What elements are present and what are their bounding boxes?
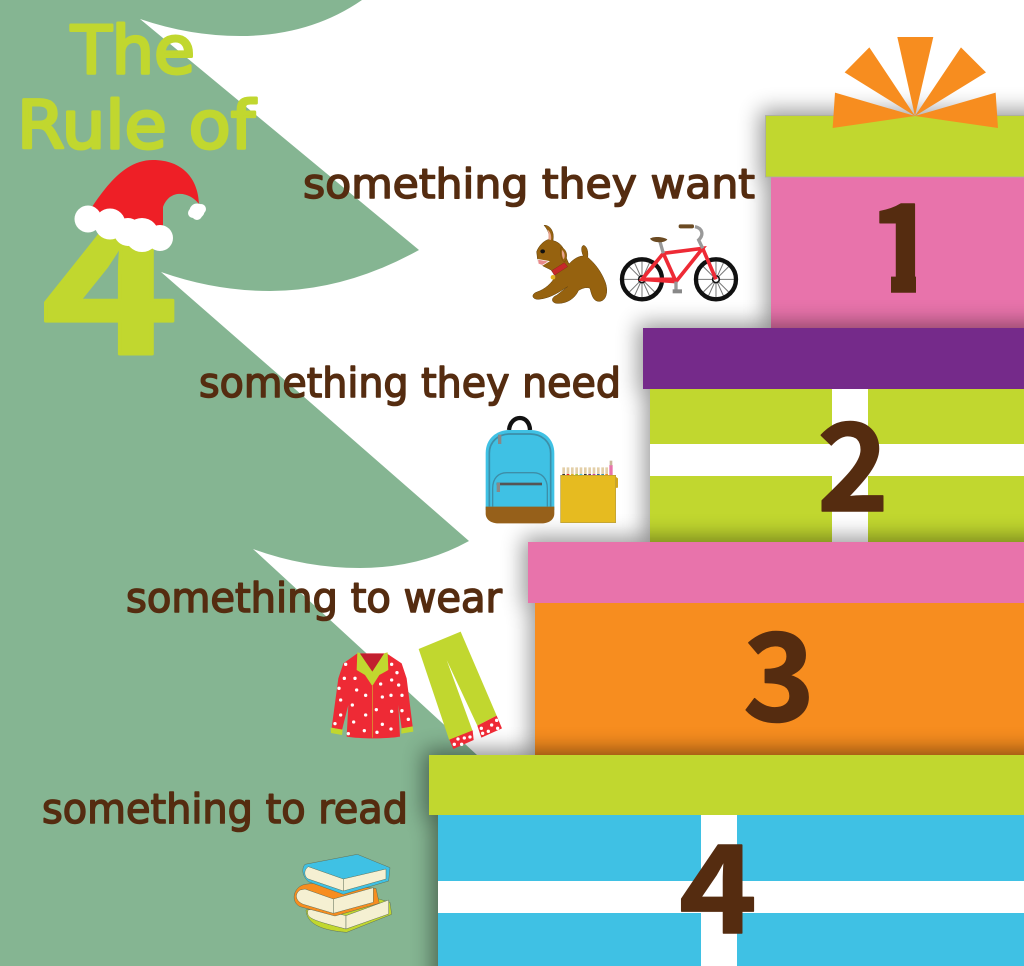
gift box 4 bbox=[424, 750, 1024, 966]
gift box 2 bbox=[638, 323, 1024, 547]
large numeral 4: 4 bbox=[41, 141, 179, 407]
gift box 1 bbox=[760, 110, 1024, 330]
icon: pajama top bbox=[331, 652, 413, 738]
icon: puppy bbox=[533, 225, 607, 303]
icon: red bicycle bbox=[622, 224, 736, 299]
icon: box of coloured pencils bbox=[561, 461, 618, 523]
icon: backpack bbox=[486, 418, 554, 523]
title: Rule of bbox=[17, 87, 257, 164]
icon: stack of books bbox=[294, 854, 392, 932]
label: something to read: something to read bbox=[42, 785, 408, 833]
label: something to wear: something to wear bbox=[126, 574, 502, 622]
title bbox=[17, 12, 257, 164]
label: something they need: something they need bbox=[199, 359, 621, 407]
number 3: 3 bbox=[743, 580, 815, 757]
gift bow bbox=[833, 37, 998, 128]
title: The bbox=[70, 12, 195, 89]
number 4: 4 bbox=[679, 792, 757, 966]
gift box 3 bbox=[523, 537, 1024, 757]
icon: pajama trousers bbox=[419, 632, 502, 749]
green christmas tree background bbox=[0, 0, 477, 966]
number 2: 2 bbox=[817, 370, 889, 547]
icon: santa hat bbox=[74, 160, 206, 252]
number 1: 1 bbox=[867, 151, 939, 328]
label: something they want: something they want bbox=[303, 160, 755, 208]
